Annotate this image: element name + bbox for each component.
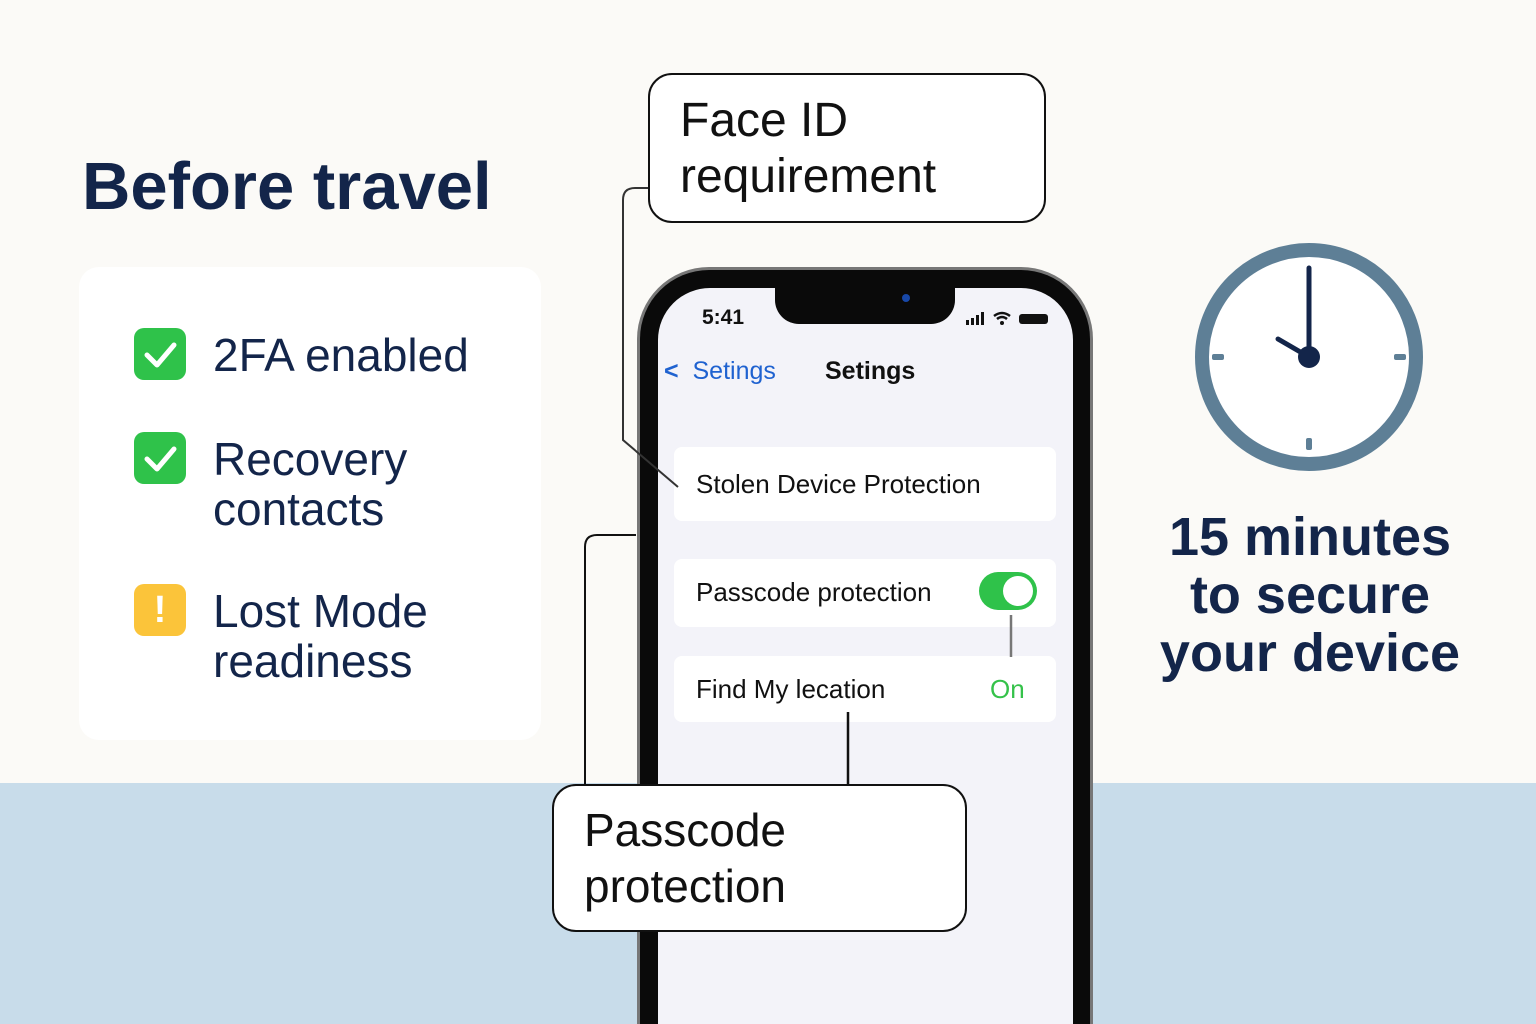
row: stolen device protection: Stolen Device Protection xyxy=(696,469,981,499)
icon: check 2FA xyxy=(134,328,186,380)
nav title: Setings xyxy=(825,357,915,385)
text: 15 minutes xyxy=(1160,507,1460,683)
text: 15 minutes: 15 minutes xyxy=(1169,507,1451,567)
row: find my location xyxy=(674,656,1056,722)
callout: Passcode protection: Passcode xyxy=(584,804,786,856)
text: Recovery contacts: contacts xyxy=(213,483,384,535)
callout: Face ID requirement xyxy=(648,73,1046,223)
text: Recovery contacts: Recovery xyxy=(213,433,407,485)
icon: check recovery xyxy=(134,432,186,484)
status icons xyxy=(966,312,1048,325)
callout: Face ID requirement: requirement xyxy=(680,150,936,203)
callout: Passcode protection: protection xyxy=(584,860,786,912)
icon: clock xyxy=(1195,243,1423,471)
text: 15 minutes: to secure xyxy=(1190,565,1430,625)
text: Lost Mode readiness xyxy=(213,585,428,687)
text: Recovery contacts xyxy=(213,433,408,535)
icon: warning lost mode xyxy=(134,584,186,636)
row: passcode protection: Passcode protection xyxy=(696,577,932,607)
callout: Passcode protection xyxy=(552,784,967,932)
notch xyxy=(775,286,955,324)
row: find my location: On xyxy=(990,674,1025,704)
text: 15 minutes: your device xyxy=(1160,623,1460,683)
text: Lost Mode readiness: Lost Mode xyxy=(213,585,428,637)
phone xyxy=(637,267,1093,1024)
blue bottom band xyxy=(0,783,1536,1024)
icon: warning lost mode: ! xyxy=(154,589,166,631)
row: find my location: Find My lecation xyxy=(696,674,885,704)
row: stolen device protection xyxy=(674,447,1056,521)
status bar time: 5:41 xyxy=(702,306,744,329)
row: passcode protection xyxy=(674,559,1056,627)
text: 2FA enabled: 2FA enabled xyxy=(213,329,469,381)
text: Lost Mode readiness: readiness xyxy=(213,635,412,687)
phone screen xyxy=(658,288,1073,1024)
nav bar: < Setings xyxy=(664,357,776,385)
callout: Face ID requirement: Face ID xyxy=(680,94,848,147)
title: Before travel xyxy=(82,149,492,224)
panel: checklist xyxy=(79,267,541,740)
